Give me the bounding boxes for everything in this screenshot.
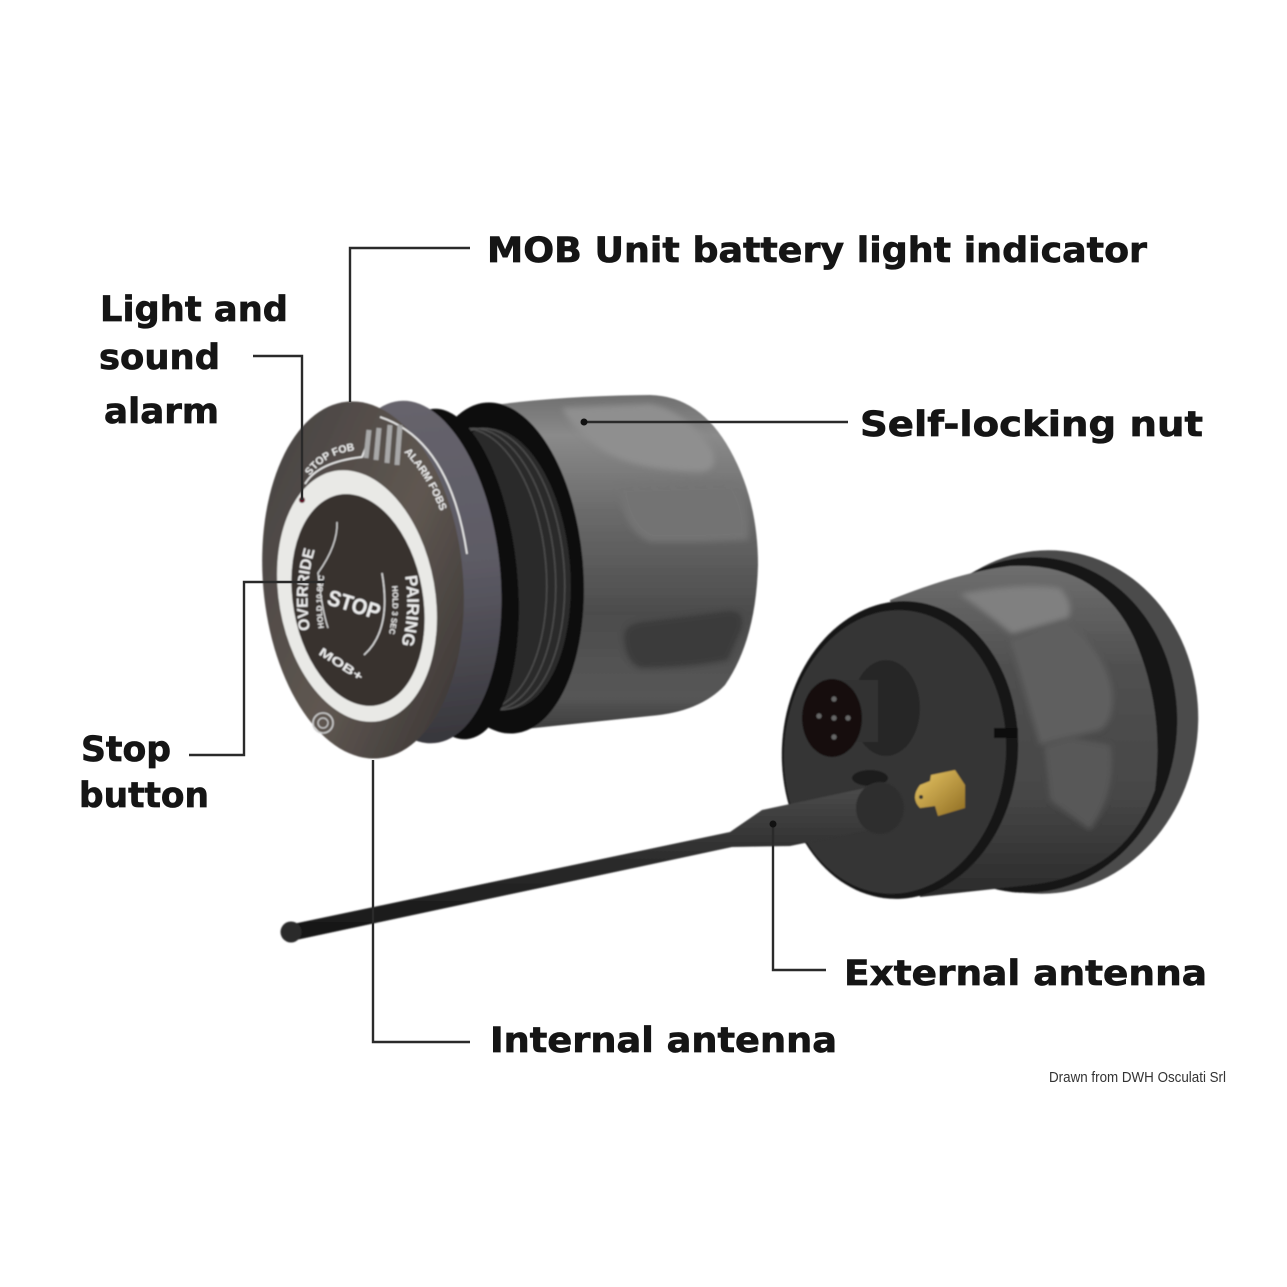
- label: Stop button: [79, 730, 209, 816]
- label: Light and sound alarm: [99, 290, 288, 432]
- label: External antenna: External antenna: [844, 954, 1207, 994]
- label: MOB Unit battery light indicator: MOB Unit battery light indicator: [487, 231, 1148, 271]
- self-locking nut body: [495, 395, 758, 730]
- leader: internal antenna: [373, 760, 470, 1042]
- label: Self-locking nut: Self-locking nut: [860, 405, 1203, 445]
- label: Light and sound alarm: sound: [99, 338, 220, 378]
- button markings: PAIRING: [401, 574, 420, 647]
- leader: external antenna: [770, 820, 826, 970]
- label: Stop button: button: [79, 776, 209, 816]
- external antenna: [280, 782, 904, 942]
- notch: [994, 728, 1018, 738]
- leader: self-locking nut: [580, 418, 848, 426]
- threaded collar and black gasket: [366, 395, 597, 746]
- gold antenna connector: [915, 770, 965, 816]
- rear flange: [875, 535, 1215, 909]
- outer rim: [316, 392, 518, 752]
- body black ring: [772, 593, 1028, 907]
- rear face: [774, 603, 1016, 901]
- face plate markings: STOP FOB: [304, 442, 355, 476]
- button markings: STOP: [325, 585, 383, 625]
- button markings: MOB+: [316, 645, 366, 684]
- antenna port shadow: [852, 770, 888, 786]
- black seal: [866, 543, 1194, 907]
- face plate markings: [298, 415, 469, 735]
- button markings: HOLD 3 SEC: [388, 584, 400, 636]
- label: Light and sound alarm: Light and: [100, 290, 288, 330]
- connector: [802, 660, 920, 757]
- unit: rear view with connector: [772, 535, 1215, 909]
- face plate markings: ALARM FOBS: [404, 448, 448, 512]
- label: Light and sound alarm: alarm: [104, 392, 219, 432]
- label: Stop button: Stop: [81, 730, 171, 770]
- button markings: [296, 520, 420, 684]
- stop button face: [275, 483, 441, 717]
- button markings: HOLD 10 SEC: [315, 574, 326, 630]
- unit: front view MOB unit: [261, 394, 759, 760]
- leader: light and sound alarm: [253, 356, 302, 500]
- leader: battery light indicator: [350, 248, 470, 402]
- white light ring: [258, 457, 456, 735]
- rear body: [890, 566, 1158, 897]
- front face plate: [248, 393, 478, 767]
- button markings: OVERRIDE: [296, 546, 316, 632]
- leader: stop button: [189, 582, 325, 755]
- label: Internal antenna: Internal antenna: [490, 1021, 837, 1061]
- credit: Drawn from DWH Osculati Srl: [1049, 1070, 1226, 1086]
